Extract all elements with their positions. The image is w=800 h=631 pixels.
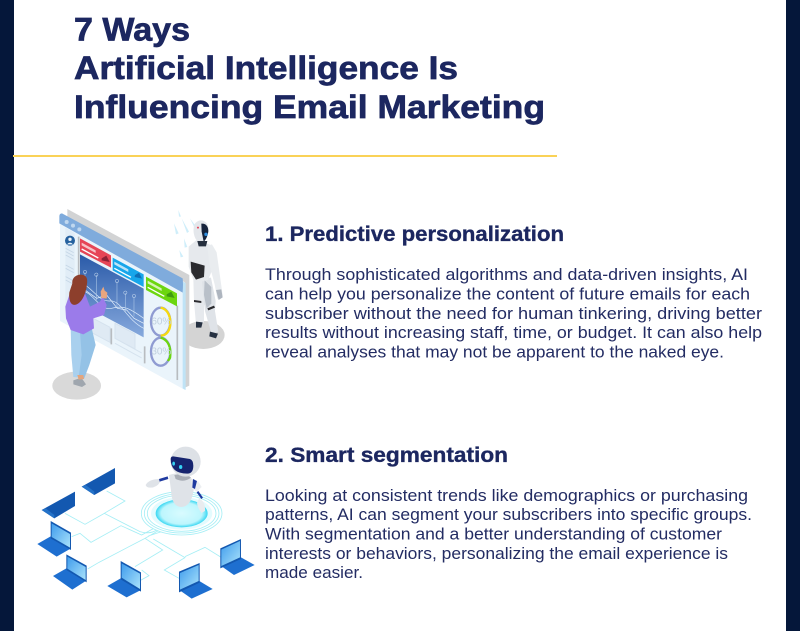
green card xyxy=(146,277,177,306)
body text: smart segmentation: patterns, AI can segment your subscribers into specific groups. xyxy=(265,506,752,524)
network lines xyxy=(65,491,222,581)
left border strip xyxy=(0,0,14,631)
dashboard panel xyxy=(60,215,185,390)
body text: predictive personalization: subscriber without the need for human tinkering, driving better xyxy=(265,305,763,323)
dashboard back panel xyxy=(67,209,189,388)
woman xyxy=(65,275,107,387)
body text: predictive personalization: can help you personalize the content of future emails for each xyxy=(265,286,750,304)
small robot xyxy=(146,447,205,513)
left laptop 2 xyxy=(53,554,87,590)
title xyxy=(74,12,545,125)
dashboard header bar xyxy=(59,213,183,293)
left laptop 1 xyxy=(37,521,71,557)
teleport rings xyxy=(141,492,222,535)
center laptop xyxy=(107,561,141,597)
back-facing laptop 1 xyxy=(82,468,115,495)
blue card xyxy=(113,258,144,287)
body text: smart segmentation: made easier. xyxy=(265,564,363,582)
body text: predictive personalization: reveal analyses that may not be apparent to the naked eye. xyxy=(265,344,724,362)
lower panel text blocks xyxy=(90,317,142,358)
body text: smart segmentation: interests or behaviors, personalizing the email experience is xyxy=(265,545,728,563)
yellow title rule xyxy=(13,155,557,157)
robot shadow xyxy=(182,321,225,349)
robot xyxy=(189,220,223,338)
person shadow xyxy=(52,372,101,400)
right laptop 2 xyxy=(220,539,255,575)
body text: predictive personalization: Through sophisticated algorithms and data-driven insights, AI xyxy=(265,266,748,284)
illustration: robot connected to laptops xyxy=(37,447,255,599)
right laptop 1 xyxy=(179,563,213,599)
gauge 30 percent: 30% xyxy=(151,347,171,358)
heading: smart segmentation: 2. Smart segmentation xyxy=(265,444,508,467)
title: 7 Ways xyxy=(74,12,190,48)
column dividers xyxy=(79,237,177,380)
body text: predictive personalization xyxy=(265,266,763,362)
back-facing laptop 2 xyxy=(42,492,75,518)
right border strip xyxy=(786,0,800,631)
heading: predictive personalization: 1. Predictive personalization xyxy=(265,223,564,246)
sidebar avatar and text lines xyxy=(65,228,75,312)
title: Artificial Intelligence Is xyxy=(74,50,458,86)
body text: predictive personalization: results without increasing staff, time, or budget. It can also help xyxy=(265,324,762,342)
gauge 30 percent xyxy=(151,338,171,366)
body text: smart segmentation xyxy=(265,487,752,582)
body text: smart segmentation: Looking at consistent trends like demographics or purchasing xyxy=(265,487,748,505)
title: Influencing Email Marketing xyxy=(74,89,545,125)
body text: smart segmentation: With segmentation and a better understanding of customer xyxy=(265,526,723,544)
gauge 60 percent xyxy=(151,308,171,336)
line chart xyxy=(80,254,144,337)
illustration: woman and robot at analytics dashboard xyxy=(52,209,225,400)
hologram streaks xyxy=(174,210,196,257)
red card xyxy=(80,238,111,268)
gauge 60 percent: 60% xyxy=(151,317,171,328)
